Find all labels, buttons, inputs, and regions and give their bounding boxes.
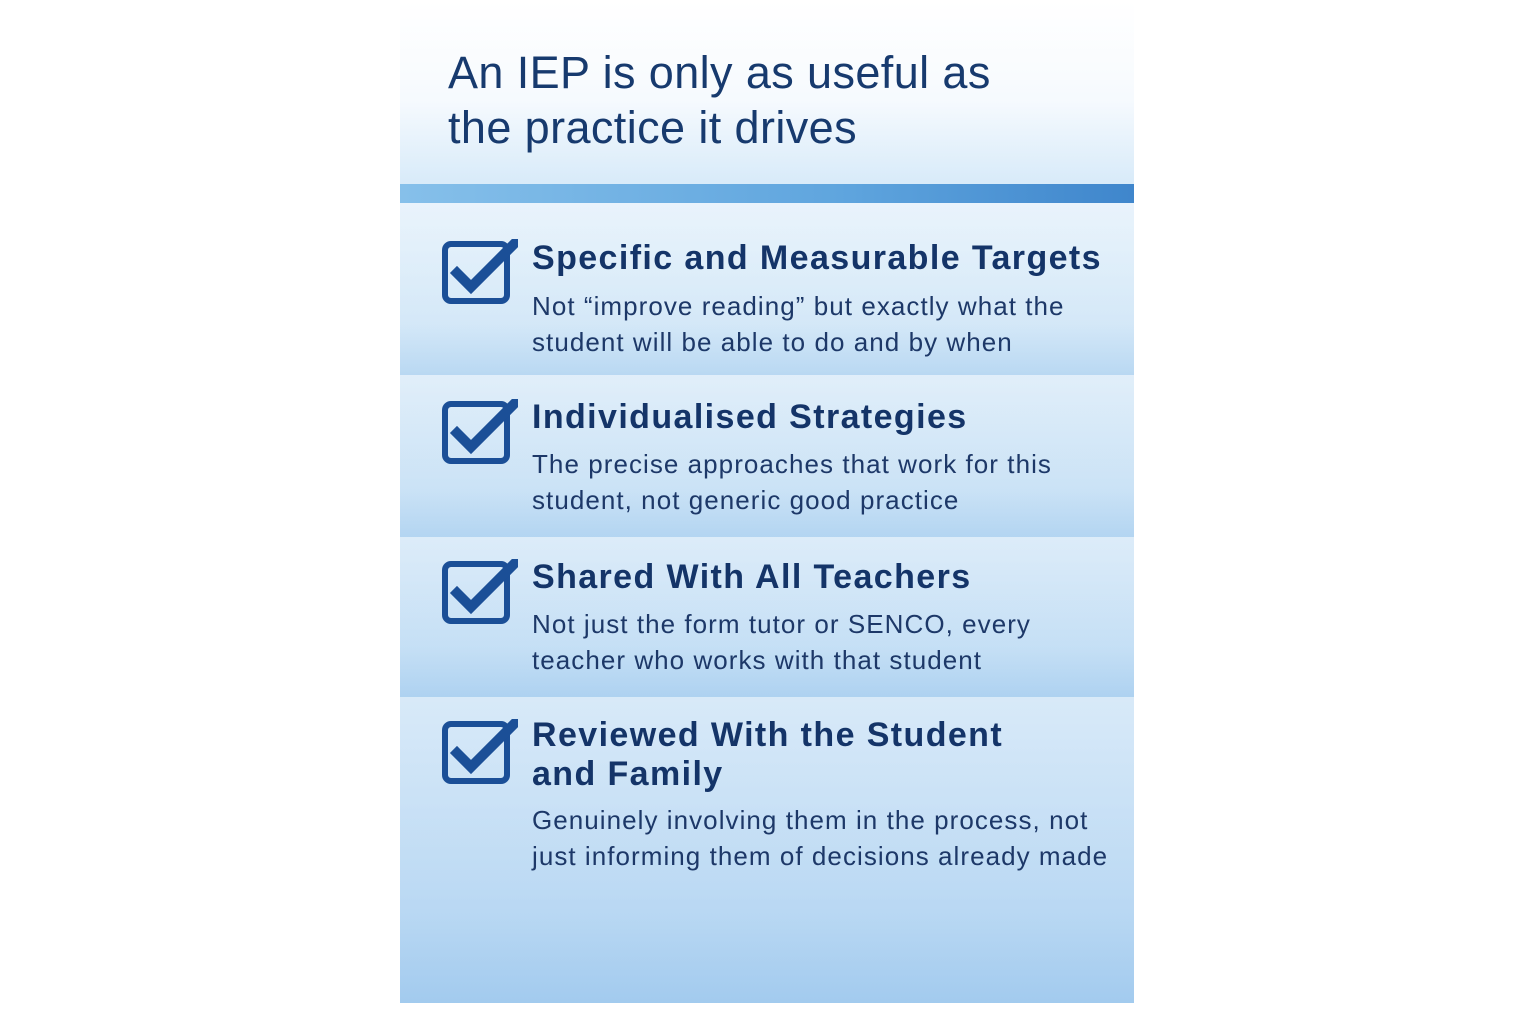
heading: Reviewed With the Student: [532, 716, 1003, 754]
title: An IEP is only as useful as: [448, 47, 991, 98]
row: specific targets: [400, 203, 1134, 375]
heading: Individualised Strategies: [532, 398, 968, 436]
heading: Shared With All Teachers: [532, 558, 972, 596]
text: [532, 609, 1031, 675]
icon: checkbox: [442, 239, 518, 304]
text: Genuinely involving them in the process, not: [532, 805, 1088, 835]
row: individualised strategies: [400, 375, 1134, 537]
row: shared with teachers: [400, 537, 1134, 697]
heading: and Family: [532, 755, 724, 793]
text: [532, 291, 1065, 357]
heading: [532, 716, 1003, 793]
text: just informing them of decisions already made: [532, 841, 1108, 871]
title: [448, 47, 991, 153]
panel: background card: [400, 0, 1134, 1003]
text: student, not generic good practice: [532, 485, 959, 515]
icon: checkbox: [442, 719, 518, 784]
text: student will be able to do and by when: [532, 327, 1013, 357]
icon: checkbox: [442, 399, 518, 464]
row: reviewed with family: [400, 697, 1134, 932]
heading: Specific and Measurable Targets: [532, 239, 1102, 277]
icon: checkbox: [442, 559, 518, 624]
text: [531, 805, 1108, 871]
text: Not “improve reading” but exactly what the: [532, 291, 1065, 321]
text: The precise approaches that work for this: [532, 449, 1052, 479]
text: Not just the form tutor or SENCO, every: [532, 609, 1031, 639]
text: teacher who works with that student: [532, 645, 982, 675]
title: the practice it drives: [448, 102, 857, 153]
text: [532, 449, 1052, 515]
